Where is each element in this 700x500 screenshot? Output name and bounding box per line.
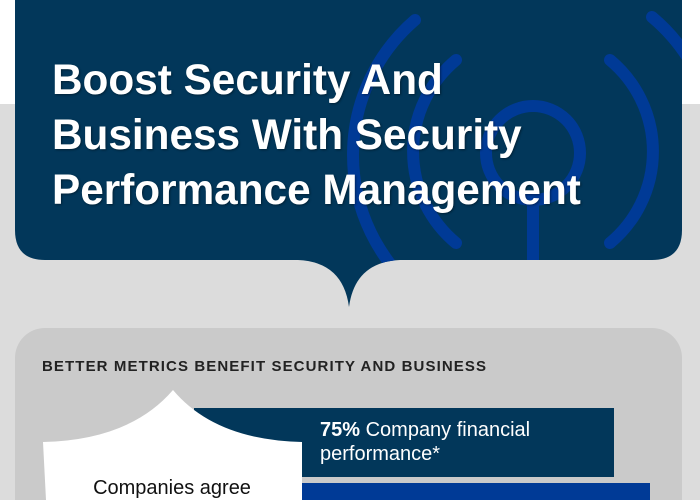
heading: BETTER METRICS BENEFIT SECURITY AND BUSINESS <box>42 358 487 375</box>
panel: metrics <box>15 328 682 500</box>
bar: financial performance <box>194 408 614 477</box>
bar: second metric <box>300 483 650 500</box>
icon: shield <box>43 390 302 500</box>
shield text: Companies agree <box>93 477 251 499</box>
icon: broadcast signal <box>347 11 682 263</box>
bar: financial performance: 75% Company financial <box>320 419 530 441</box>
title: Boost Security And <box>52 56 443 103</box>
title: Performance Management <box>52 166 581 213</box>
bar: financial performance: performance* <box>320 443 440 465</box>
title: Business With Security <box>52 111 522 158</box>
title <box>52 56 582 215</box>
header panel <box>15 0 682 307</box>
